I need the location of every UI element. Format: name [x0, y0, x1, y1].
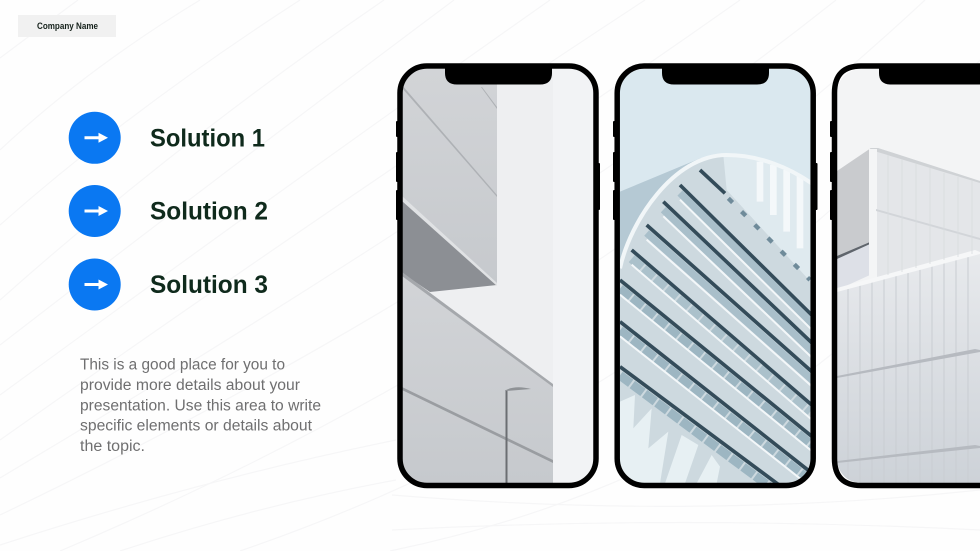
- company name badge: Company Name: [37, 21, 98, 31]
- description text block: presentation. Use this area to write: [80, 398, 321, 414]
- company name badge: [18, 15, 116, 37]
- description text block: [80, 356, 321, 455]
- fins region: [724, 157, 810, 282]
- phone 1: white building with lamp post: [396, 66, 600, 486]
- description text block: the topic.: [80, 438, 145, 455]
- description text block: This is a good place for you to: [80, 356, 285, 374]
- description text block: specific elements or details about: [80, 418, 313, 434]
- description text block: provide more details about your: [80, 377, 300, 394]
- solution 1 item: Solution 1: [150, 124, 265, 152]
- solution 3 item: [69, 258, 268, 310]
- solution 2 item: Solution 2: [150, 198, 268, 226]
- solution 1 item: [69, 112, 265, 164]
- solution 3 item: Solution 3: [150, 271, 268, 299]
- phone 3: frosted glass building, cropped by page edge: [830, 66, 980, 486]
- solution 2 item: [69, 185, 268, 237]
- phone 2: curved building with diagonal stripes: [610, 66, 823, 499]
